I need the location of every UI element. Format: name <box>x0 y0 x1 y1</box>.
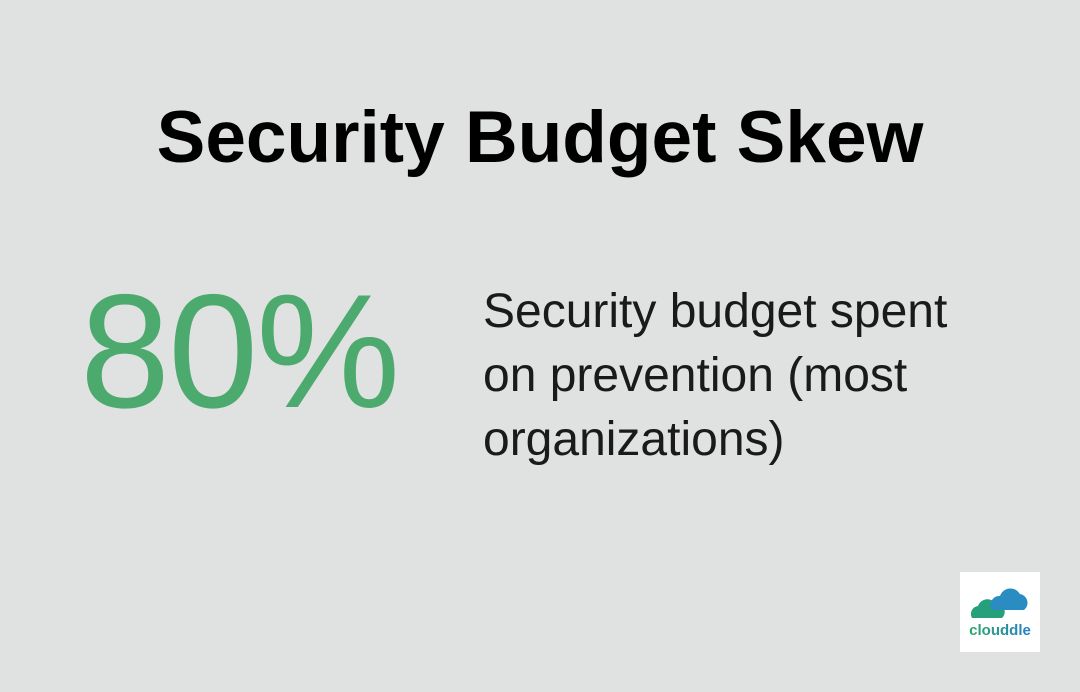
description text <box>483 285 947 466</box>
logo: clouddle <box>960 572 1040 652</box>
title: Security Budget Skew <box>157 97 923 178</box>
big statistic: 80% <box>80 261 398 442</box>
description text: organizations) <box>483 413 784 466</box>
description text: on prevention (most <box>483 349 907 402</box>
logo: clouddle: clouddle <box>969 622 1031 639</box>
description text: Security budget spent <box>483 285 947 338</box>
